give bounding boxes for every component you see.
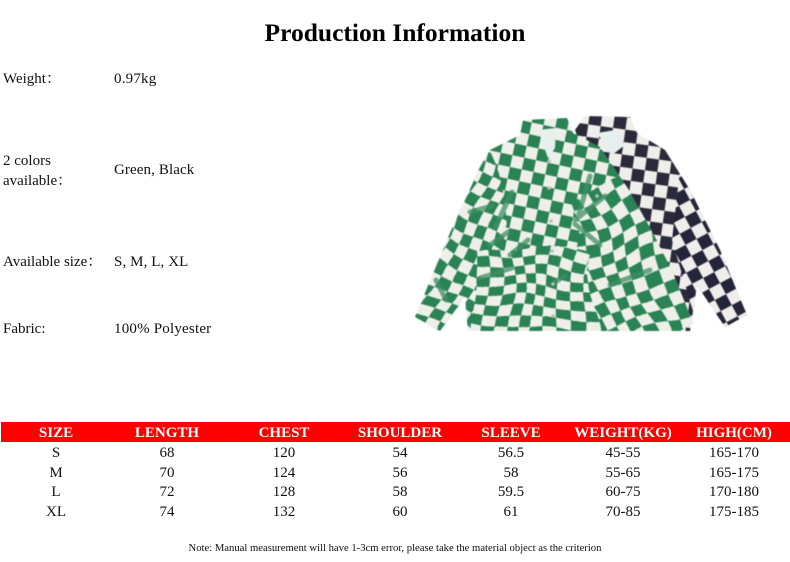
- jacket buttons: [547, 159, 599, 318]
- row S: [52, 445, 759, 461]
- row S: 68: [160, 445, 174, 461]
- weight value: 0.97kg: [114, 71, 156, 87]
- weight label: Weight：: [3, 71, 61, 87]
- colors label: 2 colors: [3, 153, 51, 169]
- table header: LENGTH: [135, 425, 199, 441]
- row L: [51, 484, 759, 500]
- colors value: Green, Black: [114, 162, 194, 178]
- row L: 128: [273, 484, 295, 500]
- row S: 54: [392, 445, 408, 461]
- row S: S: [52, 445, 60, 461]
- row M: 124: [273, 465, 295, 481]
- row M: 70: [160, 465, 174, 481]
- row XL: 175-185: [709, 504, 759, 520]
- product photo: checkered jackets: [414, 115, 748, 332]
- row XL: 61: [504, 504, 518, 520]
- fabric value: 100% Polyester: [114, 321, 211, 337]
- row M: 165-175: [709, 465, 759, 481]
- table header: [1, 422, 790, 442]
- row S: 45-55: [606, 445, 640, 461]
- table header: WEIGHT(KG): [574, 425, 672, 441]
- black jacket: [574, 115, 748, 332]
- row L: 58: [392, 484, 408, 500]
- row L: L: [51, 484, 61, 500]
- row XL: 132: [273, 504, 295, 520]
- row XL: 60: [392, 504, 408, 520]
- row M: M: [49, 465, 63, 481]
- table header: HIGH(CM): [696, 425, 772, 441]
- title: Production Information: [265, 18, 525, 47]
- row XL: 70-85: [606, 504, 640, 520]
- green cross strokes on fabric: [436, 176, 650, 300]
- row L: 72: [160, 484, 174, 500]
- size value: S, M, L, XL: [114, 254, 188, 270]
- table header: SHOULDER: [358, 425, 442, 441]
- colors label: [3, 153, 72, 189]
- row L: 59.5: [498, 484, 524, 500]
- row M: 58: [504, 465, 518, 481]
- table header: SLEEVE: [481, 425, 541, 441]
- row XL: [46, 504, 759, 520]
- row S: 120: [273, 445, 295, 461]
- row L: 60-75: [606, 484, 640, 500]
- green jacket: [414, 117, 694, 332]
- row XL: 74: [160, 504, 174, 520]
- table header: SIZE: [39, 425, 73, 441]
- row S: 165-170: [709, 445, 759, 461]
- row S: 56.5: [498, 445, 524, 461]
- fabric label: Fabric:: [3, 321, 46, 337]
- colors label: available：: [3, 173, 72, 189]
- row M: 56: [392, 465, 408, 481]
- row L: 170-180: [709, 484, 759, 500]
- row M: 55-65: [606, 465, 640, 481]
- table header: CHEST: [259, 425, 309, 441]
- size label: Available size：: [3, 254, 102, 270]
- row M: [49, 465, 759, 481]
- row XL: XL: [46, 504, 66, 520]
- footnote: Note: Manual measurement will have 1-3cm error, please take the material object as the criterion: [189, 543, 601, 554]
